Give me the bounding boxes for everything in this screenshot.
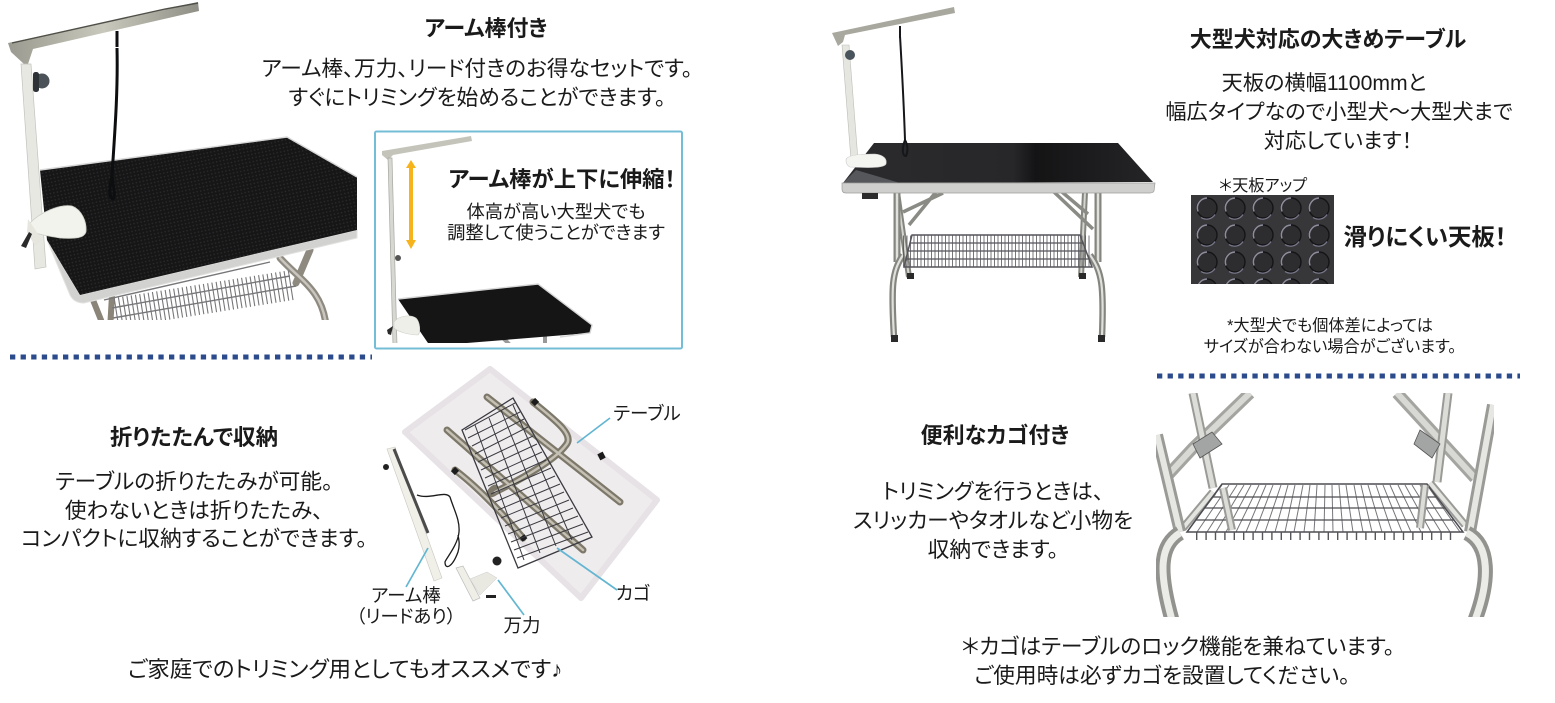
outer legs — [1157, 405, 1493, 620]
wire basket — [1187, 484, 1463, 536]
panel: large table — [832, 7, 1513, 356]
footnote: サイズが合わない場合がございます。 — [1204, 337, 1456, 356]
arrow: up and down — [406, 160, 416, 249]
lead — [900, 26, 907, 156]
footnote — [1204, 317, 1456, 356]
photo: folded parts — [356, 369, 681, 636]
arm post — [21, 64, 46, 269]
caution note: ＊カゴはテーブルのロック機能を兼ねています。 — [961, 634, 1395, 659]
table frame — [842, 183, 1155, 193]
text block: トリミングを行うときは、 — [882, 479, 1104, 504]
frame tubes — [447, 397, 620, 550]
clamp part — [456, 566, 480, 601]
table legs — [93, 250, 326, 330]
closing note: ご家庭でのトリミング用としてもオススメです♪ — [128, 657, 562, 682]
legs — [893, 192, 1103, 337]
part labels: アーム棒 — [371, 585, 441, 606]
table top — [843, 143, 1153, 183]
text block — [261, 56, 693, 110]
heading: アーム棒付き — [425, 16, 547, 41]
feet — [891, 273, 1105, 342]
callout text — [447, 201, 665, 243]
photo: basket close-up — [1157, 393, 1493, 620]
text block: 天板の横幅1100mmと — [1222, 71, 1426, 95]
lead — [110, 31, 117, 199]
heading: 折りたたんで収納 — [110, 425, 278, 450]
clamp pad — [29, 206, 86, 238]
panel: arm adjustable callout — [375, 132, 682, 348]
panel: basket — [853, 393, 1493, 688]
text block — [853, 479, 1133, 562]
part labels — [356, 403, 681, 636]
panel: folding storage — [21, 369, 681, 682]
text block — [21, 469, 367, 551]
texture caption: ＊天板アップ — [1219, 177, 1307, 195]
text block: すぐにトリミングを始めることができます。 — [288, 85, 666, 110]
clamp pad — [846, 154, 886, 168]
knob — [33, 72, 50, 92]
part labels: （リードあり） — [356, 606, 456, 627]
basket — [104, 262, 296, 318]
table underside — [405, 369, 657, 598]
texture note: 滑りにくい天板！ — [1344, 224, 1506, 250]
part labels: テーブル — [613, 403, 681, 424]
callout text: 調整して使うことができます — [447, 222, 665, 243]
callout frame — [375, 132, 682, 348]
heading: 便利なカゴ付き — [921, 423, 1069, 448]
legs and braces — [1168, 393, 1475, 528]
heading: 大型犬対応の大きめテーブル — [1190, 27, 1467, 52]
footnote: *大型犬でも個体差によっては — [1227, 317, 1433, 335]
arm bar — [8, 2, 199, 64]
leader lines — [406, 418, 617, 615]
text block: 使わないときは折りたたみ、 — [65, 498, 323, 523]
callout heading: アーム棒が上下に伸縮！ — [448, 166, 676, 192]
photo: table front — [832, 7, 1155, 342]
small photo — [382, 136, 592, 346]
text block — [1165, 71, 1513, 153]
wire basket — [462, 398, 592, 568]
arm — [832, 7, 955, 46]
arm bar part — [387, 447, 442, 581]
text block: スリッカーやタオルなど小物を — [853, 508, 1133, 533]
joints — [1193, 430, 1440, 458]
panel: arm bar feature — [8, 2, 693, 330]
text block: アーム棒、万力、リード付きのお得なセットです。 — [261, 56, 693, 81]
part labels: 万力 — [503, 615, 541, 636]
text block: 幅広タイプなので小型犬～大型犬まで — [1165, 100, 1513, 124]
text block: 収納できます。 — [928, 537, 1058, 562]
part labels: カゴ — [616, 583, 650, 604]
caution note: ご使用時は必ずカゴを設置してください。 — [974, 663, 1350, 688]
table top — [47, 230, 357, 303]
basket — [903, 235, 1092, 267]
text block: 対応しています！ — [1264, 129, 1412, 153]
callout text: 体高が高い大型犬でも — [466, 201, 646, 222]
lead part — [417, 494, 459, 567]
text block: テーブルの折りたたみが可能。 — [55, 469, 333, 494]
caution note — [961, 634, 1395, 688]
text block: コンパクトに収納することができます。 — [21, 526, 367, 551]
photo: table with arm — [8, 2, 357, 330]
texture close-up — [1191, 195, 1334, 284]
